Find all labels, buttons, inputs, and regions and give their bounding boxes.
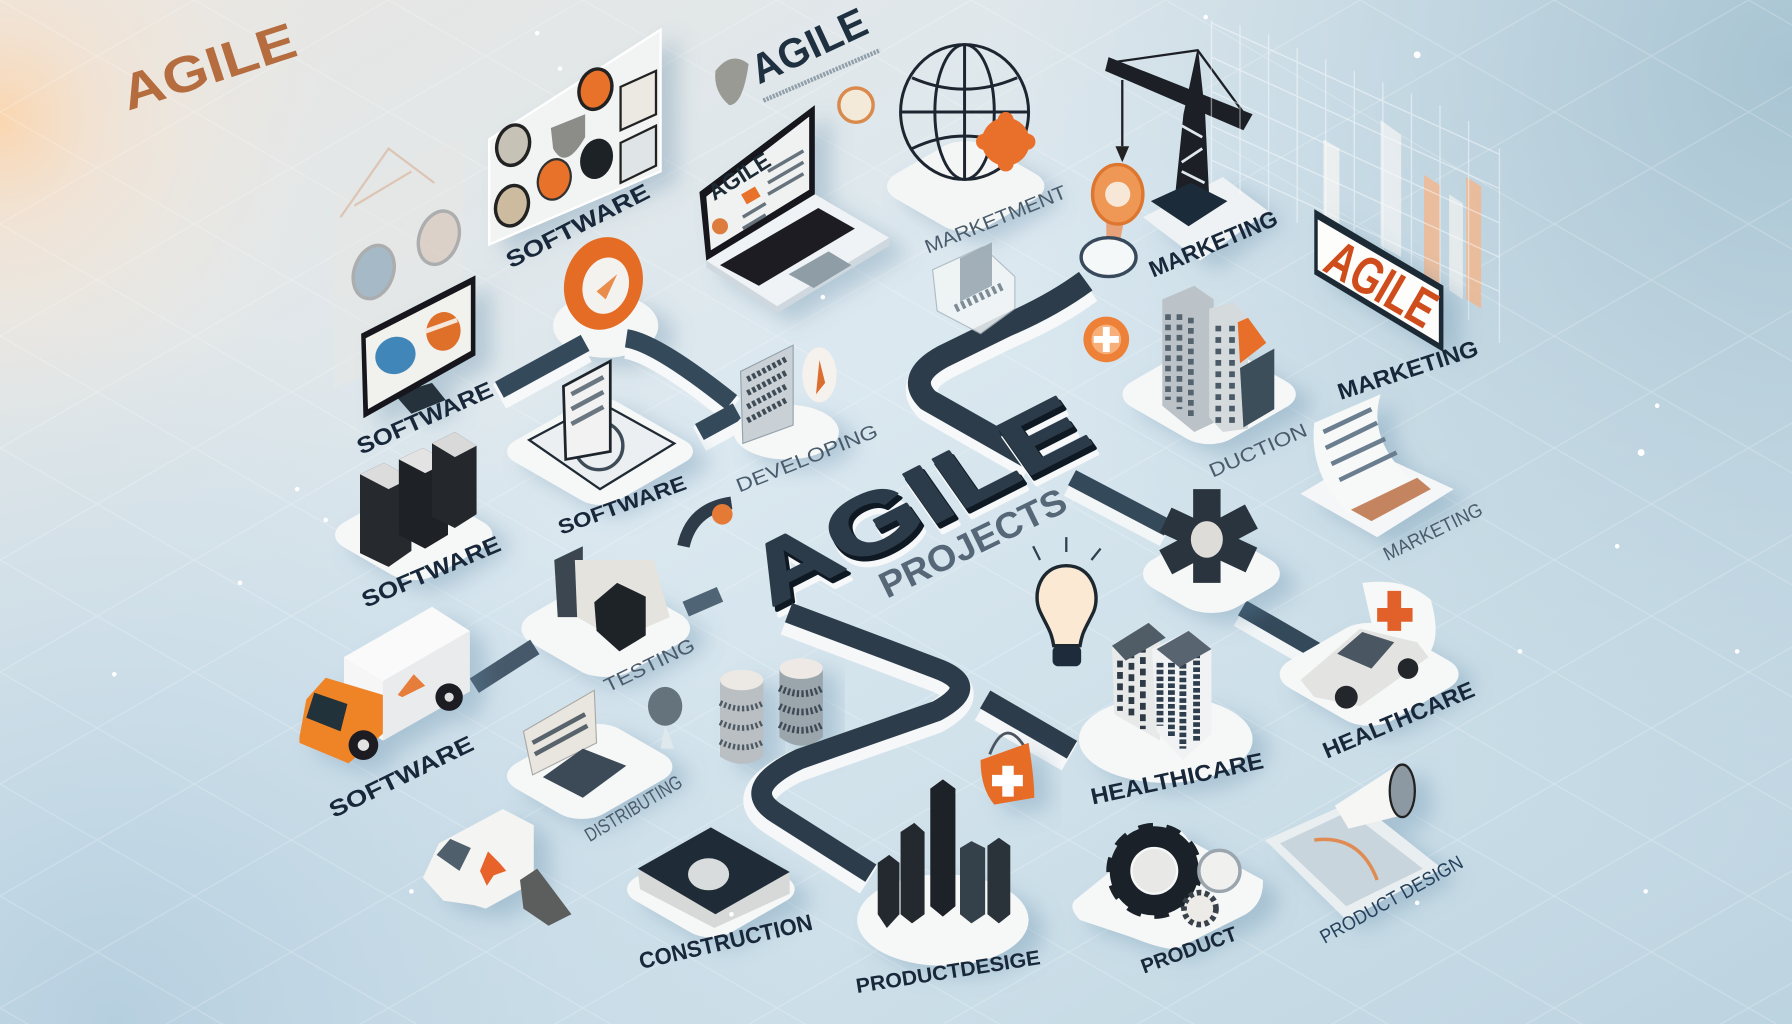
heading: top-left AGILE: AGILE xyxy=(114,11,303,121)
laptop trackpad xyxy=(789,251,851,288)
icon: faint building centre xyxy=(933,242,1015,334)
icon: construction crane xyxy=(1105,50,1269,261)
label: MARKETMENT xyxy=(922,181,1070,258)
buildings platform xyxy=(1110,337,1309,451)
book emblem xyxy=(688,858,729,890)
label: MARKETING xyxy=(1334,335,1481,405)
label: PRODUCT xyxy=(1138,922,1241,978)
label: SOFTWARE xyxy=(353,376,497,459)
asterisk platform xyxy=(1128,526,1295,622)
cargo logo xyxy=(398,674,425,697)
cargo box xyxy=(344,607,470,741)
icon: asterisk xyxy=(1128,489,1295,622)
icon: orb xyxy=(648,687,682,749)
icon: board circle orange top xyxy=(574,65,617,114)
bars platform xyxy=(857,874,1029,966)
cylinder left stripes xyxy=(720,703,763,747)
orange roof xyxy=(1238,318,1266,363)
icon: monitor xyxy=(361,275,475,418)
label: MARKETING xyxy=(1145,205,1281,282)
road: cluster link xyxy=(686,594,720,609)
icon: document and capsule xyxy=(734,345,839,459)
panel: software icon board xyxy=(489,30,661,245)
icon: board circle black xyxy=(575,134,618,183)
right tower xyxy=(1152,631,1211,760)
globe wireframe xyxy=(901,45,1029,179)
wheels xyxy=(349,730,378,760)
label: HEALTHICARE xyxy=(1088,747,1266,809)
server platform xyxy=(322,482,505,587)
cylinder right stripes xyxy=(779,688,823,730)
icon: laptop xyxy=(699,105,889,313)
car body xyxy=(1301,629,1429,706)
icon: board circle orange bottom xyxy=(533,155,576,204)
label: DEVELOPING xyxy=(733,420,881,497)
icon: globe xyxy=(874,45,1057,239)
icon: server blocks xyxy=(322,432,505,587)
heading: large 3D AGILE xyxy=(728,379,1112,633)
icon: car with flag xyxy=(1266,582,1473,734)
label: SOFTWARE xyxy=(325,730,478,823)
road: upper right continuation xyxy=(1070,478,1326,663)
heading: large 3D AGILE: AGILE xyxy=(733,390,1112,633)
cluster box xyxy=(594,583,646,651)
heading: large 3D AGILE: AGILE xyxy=(728,379,1106,622)
bar 5 xyxy=(987,838,1010,923)
panel: AGILE sign: AGILE xyxy=(1315,229,1448,340)
icon: plus circle xyxy=(1083,317,1129,362)
label: DISTRIBUTING xyxy=(581,771,686,847)
cylinder right xyxy=(779,659,823,746)
server 2 xyxy=(399,448,448,549)
bulb glass xyxy=(1037,566,1096,646)
label: CONSTRUCTION xyxy=(636,909,815,974)
heading: large 3D AGILE: AGILE xyxy=(731,384,1110,627)
book platform xyxy=(615,834,806,944)
label: MARKETING xyxy=(1380,499,1486,566)
car platform xyxy=(1266,615,1473,734)
road: upper right xyxy=(919,281,1088,464)
globe platform xyxy=(874,134,1057,239)
laptop screen title: AGILE xyxy=(703,147,775,205)
mid block xyxy=(1209,302,1248,432)
panel screen xyxy=(523,690,597,775)
heading: PROJECTS: PROJECTS xyxy=(872,480,1073,606)
icon: small orange ring xyxy=(839,88,873,122)
big gear xyxy=(1112,829,1197,913)
board text box bottom xyxy=(621,126,656,183)
icon: office buildings xyxy=(1110,286,1309,451)
icon: tablet on platform xyxy=(497,361,703,511)
crane base xyxy=(1151,183,1227,226)
towers platform xyxy=(1079,696,1253,783)
icon: board cylinder xyxy=(551,114,585,158)
icon: cylinders xyxy=(720,658,823,764)
icon: orange pin on road end xyxy=(1081,165,1143,277)
bulb base xyxy=(1053,646,1081,666)
document platform xyxy=(734,405,839,459)
globe flower xyxy=(976,112,1035,171)
icon: board circle sketch lower xyxy=(490,181,534,230)
icon: map and megaphone xyxy=(1265,765,1442,920)
cab xyxy=(299,678,383,763)
label: PRODUCTDESIGE xyxy=(854,946,1042,998)
panel: AGILE sign xyxy=(1314,209,1448,352)
road: upper left segments xyxy=(499,338,737,439)
label: SOFTWARE xyxy=(555,472,690,540)
bar 3 xyxy=(930,779,955,917)
crane tower xyxy=(1175,50,1209,208)
icon: paper report xyxy=(1301,394,1454,537)
cylinder right top xyxy=(779,658,823,679)
label: TESTING xyxy=(601,634,699,697)
panel platform xyxy=(494,717,685,826)
server 3 xyxy=(432,432,477,528)
cluster platform xyxy=(506,571,705,686)
tablet platform xyxy=(497,392,703,511)
panel base xyxy=(543,749,626,798)
cluster screens xyxy=(554,546,583,617)
dark block xyxy=(1240,349,1274,427)
icon: orange medical bag xyxy=(981,733,1034,805)
icon: curved hook xyxy=(683,503,733,546)
road: truck link xyxy=(474,647,535,686)
bar 1 xyxy=(878,855,899,928)
small gear top xyxy=(1199,850,1240,891)
crane platform xyxy=(1143,177,1269,261)
laptop screen icons xyxy=(712,151,803,234)
label: SOFTWARE xyxy=(358,531,504,613)
road: lower xyxy=(759,613,1072,880)
label: PRODUCT DESIGN xyxy=(1316,852,1467,948)
board text box top xyxy=(621,71,656,130)
chart: 3D bars xyxy=(857,779,1029,966)
book block xyxy=(638,830,790,928)
icon: striped crate xyxy=(520,869,571,926)
cylinder left xyxy=(720,670,763,764)
label: DUCTION xyxy=(1206,419,1311,482)
map xyxy=(1265,800,1442,920)
flag xyxy=(1362,582,1436,657)
crane cables xyxy=(1109,50,1248,146)
small gear lower xyxy=(1184,893,1216,925)
icon: book xyxy=(615,827,806,944)
server 1 xyxy=(360,463,411,567)
tablet base xyxy=(529,402,674,489)
icon: twin towers xyxy=(1079,623,1253,783)
disc platform xyxy=(553,294,658,358)
icon: orange disc xyxy=(553,228,658,358)
icon: board circle sketch left xyxy=(492,121,535,170)
megaphone xyxy=(1335,766,1408,829)
chart: wall grid with bars xyxy=(1211,21,1499,343)
laptop keyboard xyxy=(720,208,855,286)
wall lines xyxy=(1211,21,1499,343)
crane jib xyxy=(1105,57,1253,130)
icon: AGILE logo top: AGILE xyxy=(743,0,875,93)
bar 2 xyxy=(901,823,925,923)
cylinder left top xyxy=(720,670,763,690)
bulb rays xyxy=(1033,537,1101,560)
icon: light bulb xyxy=(1033,537,1101,666)
icon: gears xyxy=(1072,827,1263,949)
icon: device cluster xyxy=(506,546,705,686)
tall block xyxy=(1162,286,1214,432)
capsule xyxy=(802,347,837,402)
crane hook xyxy=(1115,146,1129,162)
bar 4 xyxy=(960,841,985,923)
panel: faint software sketch xyxy=(334,135,466,389)
tablet screen xyxy=(563,361,610,459)
icon: van xyxy=(423,809,534,909)
left tower xyxy=(1112,623,1160,741)
label: HEALTHCARE xyxy=(1319,676,1478,763)
gears platform xyxy=(1072,827,1263,949)
sparkles xyxy=(112,15,1739,917)
car wheels xyxy=(1335,686,1358,709)
icon: truck xyxy=(299,607,470,763)
wall bars xyxy=(1323,120,1481,309)
glass document xyxy=(741,345,793,443)
label: SOFTWARE xyxy=(501,178,654,273)
icon: monitor on platform xyxy=(494,690,685,826)
